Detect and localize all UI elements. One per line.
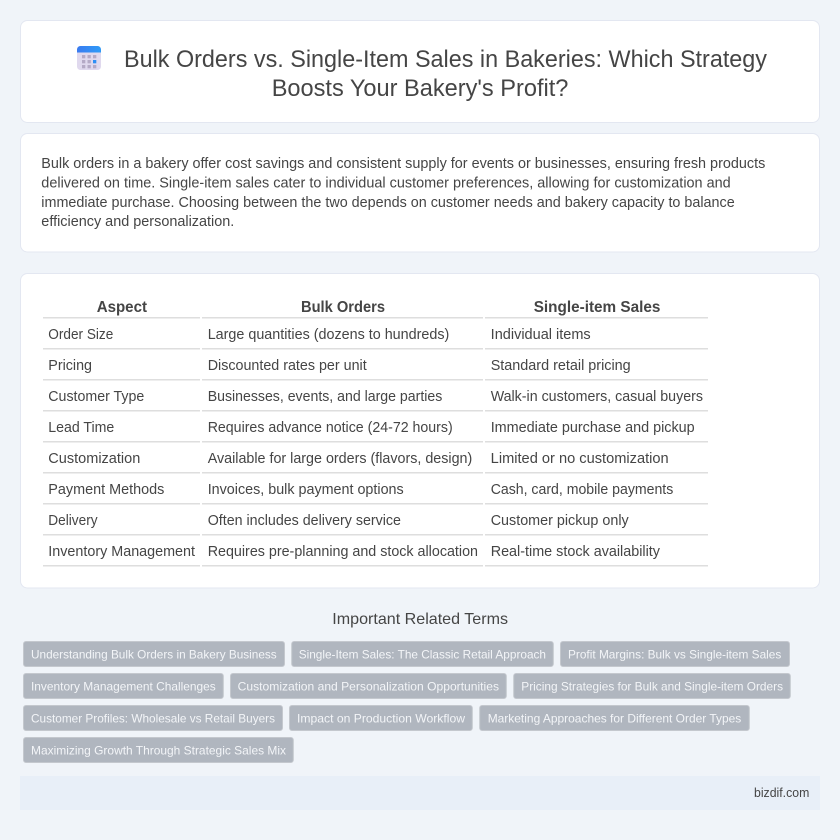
intro paragraph: delivered on time. Single-item sales cater to individual customer preferences, allowing for customization and [41,175,731,191]
footer site name: bizdif.com [754,785,809,800]
row: pricing: Discounted rates per unit [208,358,367,374]
title: Bulk Orders vs. Single-Item Sales in Bakeries: Which Strategy [124,46,767,73]
table header row: Single-item Sales [534,299,660,316]
row: pricing: Pricing [48,358,92,374]
heading: important related terms: Important Related Terms [332,611,508,628]
row: customization: Available for large orders (flavors, design) [208,451,472,467]
panel: header [20,20,820,122]
tag: customization opportunities: Customization and Personalization Opportunities [238,679,499,693]
title [124,46,767,102]
tag: marketing approaches [480,706,749,730]
intro paragraph [41,156,765,230]
row: delivery: Often includes delivery service [208,513,401,529]
tag: production workflow: Impact on Production Workflow [297,711,465,725]
tag: pricing strategies [514,674,790,698]
row: payment methods: Payment Methods [48,482,164,498]
row: order size: Order Size [48,327,113,343]
tag: inventory management challenges: Inventory Management Challenges [31,679,216,693]
tag: pricing strategies: Pricing Strategies for Bulk and Single-item Orders [521,679,783,693]
row: lead time: Requires advance notice (24-72 hours) [208,420,453,436]
tag: understanding bulk orders [24,642,284,666]
table header row: Bulk Orders [301,299,385,316]
row: inventory management: Real-time stock availability [491,544,661,560]
row: customization [43,451,708,474]
table header row: Aspect [97,299,148,316]
tag: understanding bulk orders: Understanding Bulk Orders in Bakery Business [31,647,277,661]
row: customer type [43,389,708,412]
panel: comparison table [20,274,820,588]
row: delivery [43,513,708,536]
tag: inventory management challenges [24,674,223,698]
panel: related term tags [24,642,790,762]
table header row [43,299,708,318]
tag: profit margins [560,642,790,666]
tag: single-item sales [292,642,553,666]
row: lead time: Lead Time [48,420,114,436]
row: payment methods [43,482,708,504]
row: order size: Individual items [491,327,591,343]
icon: calendar [77,46,101,70]
row: customization: Limited or no customization [491,451,669,467]
title: Boosts Your Bakery's Profit? [272,75,568,102]
tag: customer profiles [24,706,282,730]
tag: single-item sales: Single-Item Sales: The Classic Retail Approach [299,647,546,661]
row: customization: Customization [48,451,140,467]
row: order size: Large quantities (dozens to hundreds) [208,327,449,343]
row: payment methods: Invoices, bulk payment options [208,482,404,498]
tag: profit margins: Profit Margins: Bulk vs Single-item Sales [568,647,781,661]
row: payment methods: Cash, card, mobile payments [491,482,673,498]
row: delivery: Customer pickup only [491,513,629,529]
row: inventory management: Inventory Management [48,544,195,560]
row: delivery: Delivery [48,513,98,529]
panel: introduction [20,134,820,252]
row: lead time: Immediate purchase and pickup [491,420,695,436]
tag: marketing approaches: Marketing Approaches for Different Order Types [488,711,741,725]
tag: maximizing growth: Maximizing Growth Through Strategic Sales Mix [31,743,286,757]
row: inventory management: Requires pre-planning and stock allocation [208,544,478,560]
row: pricing: Standard retail pricing [491,358,631,374]
tag: maximizing growth [24,738,293,762]
row: customer type: Customer Type [48,389,144,405]
tag: customization opportunities [230,674,506,698]
row: customer type: Businesses, events, and large parties [208,389,442,405]
row: order size [43,327,708,350]
intro paragraph: Bulk orders in a bakery offer cost savings and consistent supply for events or businesses, ensuring fresh products [41,156,765,172]
tag: customer profiles: Customer Profiles: Wholesale vs Retail Buyers [31,711,275,725]
row: lead time [43,420,708,442]
tag: production workflow [290,706,472,730]
row: inventory management [43,544,708,566]
intro paragraph: immediate purchase. Choosing between the two depends on customer needs and bakery capacity to balance [41,195,735,211]
row: pricing [43,358,708,380]
row: customer type: Walk-in customers, casual buyers [491,389,703,405]
footer [20,776,820,810]
intro paragraph: efficiency and personalization. [41,214,234,230]
